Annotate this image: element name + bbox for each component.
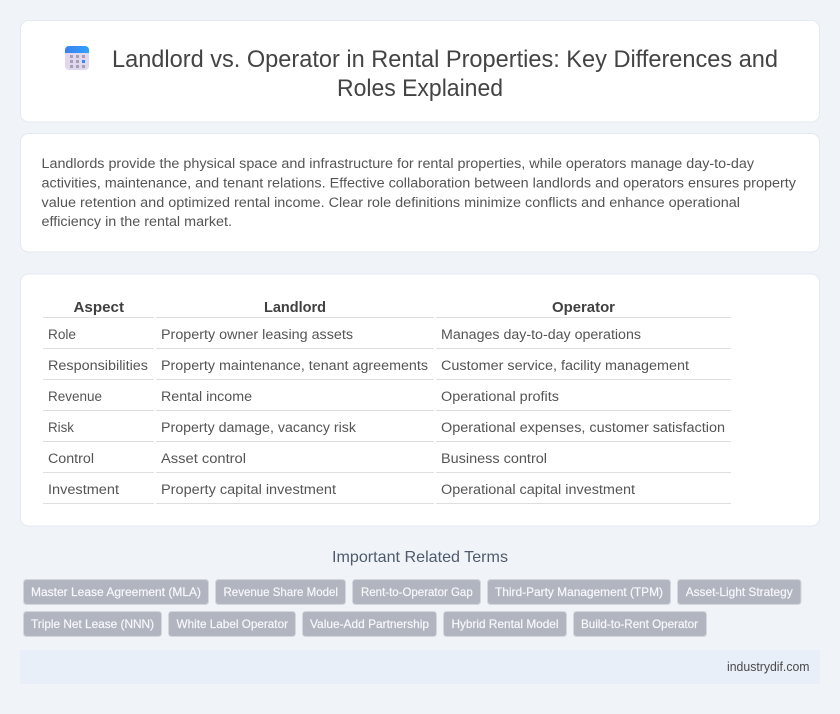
row: revenue: Operational profits [441, 389, 559, 405]
tag: triple net lease: Triple Net Lease (NNN) [31, 617, 154, 631]
table header row: Landlord [264, 299, 326, 316]
panel: header [20, 20, 820, 122]
row: role: Manages day-to-day operations [441, 327, 641, 343]
row: control: Business control [441, 451, 547, 467]
title: Landlord vs. Operator in Rental Properties: Key Differences and [112, 46, 778, 73]
tag: hybrid rental model [444, 612, 566, 636]
title: Roles Explained [337, 75, 503, 102]
table header row: Aspect [74, 299, 124, 316]
panel: summary paragraph [20, 134, 820, 252]
tag: hybrid rental model: Hybrid Rental Model [452, 617, 558, 631]
tag: revenue share model: Revenue Share Model [224, 585, 338, 599]
row: responsibilities: Property maintenance, tenant agreements [161, 358, 428, 374]
tag: asset-light strategy [678, 580, 801, 604]
row: revenue [48, 389, 559, 405]
panel: summary paragraph: value retention and optimized rental income. Clear role definitions minimize conflicts and enhance operational [42, 195, 740, 211]
panel: comparison table [20, 274, 820, 526]
panel: summary paragraph: efficiency in the rental market. [42, 214, 232, 230]
row: investment: Property capital investment [161, 482, 336, 498]
tag: triple net lease [24, 612, 162, 636]
tag: build-to-rent operator [574, 612, 706, 636]
row: risk: Operational expenses, customer satisfaction [441, 420, 725, 436]
tag: third-party management: Third-Party Management (TPM) [495, 585, 663, 599]
row: control: Asset control [161, 451, 246, 467]
tag: value-add partnership: Value-Add Partnership [310, 617, 429, 631]
tag: white label operator: White Label Operator [176, 617, 288, 631]
row: risk [48, 420, 725, 436]
tag: rent-to-operator gap: Rent-to-Operator Gap [361, 585, 473, 599]
tag: master lease agreement [24, 580, 208, 604]
footer: industrydif.com [727, 660, 810, 674]
table header row: Operator [552, 299, 615, 316]
tag: third-party management [488, 580, 670, 604]
row: responsibilities [48, 358, 689, 374]
row: control [48, 451, 547, 467]
heading: important related terms: Important Related Terms [332, 549, 508, 566]
icon: calendar [65, 46, 89, 70]
footer [20, 650, 820, 684]
row: risk: Risk [48, 420, 75, 436]
row: role: Property owner leasing assets [161, 327, 353, 343]
panel: related term tags [24, 580, 801, 636]
row: role: Role [48, 327, 76, 343]
row: revenue: Rental income [161, 389, 252, 405]
row: investment: Investment [48, 482, 119, 498]
row: risk: Property damage, vacancy risk [161, 420, 357, 436]
tag: build-to-rent operator: Build-to-Rent Operator [581, 617, 698, 631]
tag: rent-to-operator gap [352, 580, 480, 604]
row: investment [48, 482, 635, 498]
tag: revenue share model [216, 580, 346, 604]
tag: value-add partnership [302, 612, 436, 636]
row: control: Control [48, 451, 94, 467]
panel: summary paragraph: Landlords provide the physical space and infrastructure for rental properties, while operators manage day-to-day [42, 156, 755, 172]
panel: summary paragraph: activities, maintenance, and tenant relations. Effective collaboration between landlords and operators ensures property [42, 176, 797, 192]
tag: master lease agreement: Master Lease Agreement (MLA) [31, 585, 201, 599]
tag: asset-light strategy: Asset-Light Strategy [686, 585, 793, 599]
title [112, 46, 778, 102]
row: investment: Operational capital investment [441, 482, 635, 498]
row: role [48, 327, 641, 343]
row: revenue: Revenue [48, 389, 102, 405]
tag: white label operator [168, 612, 296, 636]
table header row [74, 299, 615, 316]
row: responsibilities: Customer service, facility management [441, 358, 689, 374]
row: responsibilities: Responsibilities [48, 358, 148, 374]
